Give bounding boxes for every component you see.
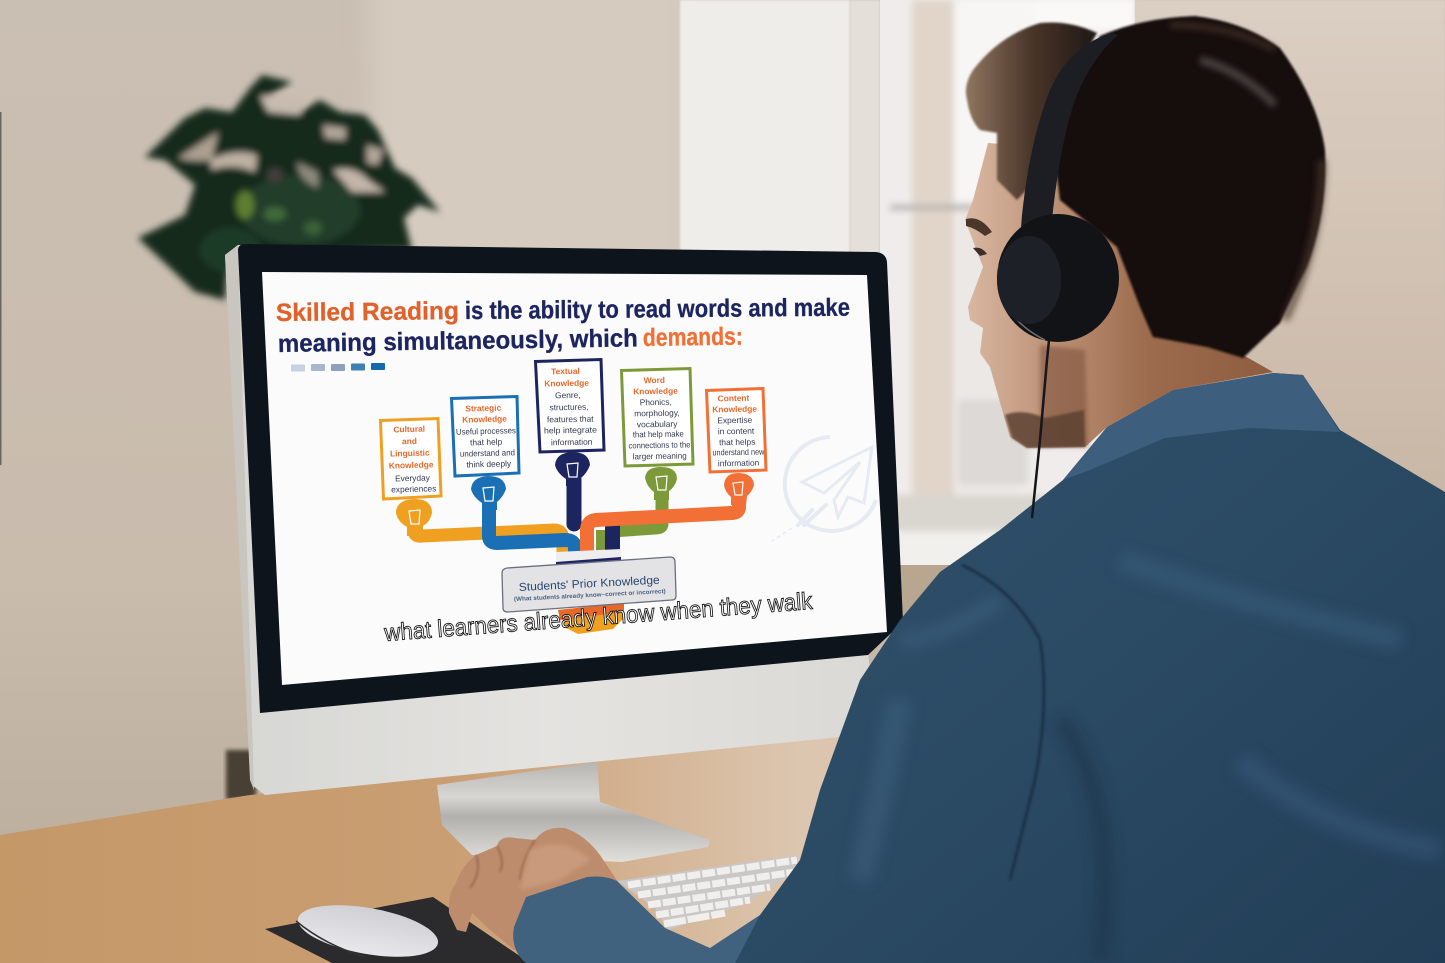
knowledge box: word: larger meaning	[633, 450, 687, 461]
title	[276, 294, 850, 358]
knowledge box: strategic: Knowledge	[462, 413, 507, 425]
knowledge box: strategic	[452, 396, 519, 476]
desk	[0, 735, 1000, 963]
knowledge box: content: Content	[718, 393, 750, 403]
knowledge box: word: vocabulary	[637, 419, 678, 429]
knowledge box: textual: information	[551, 437, 593, 447]
headphone cable	[1032, 340, 1049, 518]
title: meaning simultaneously, which	[278, 324, 638, 358]
pot shadow behind monitor	[226, 750, 256, 800]
knowledge box: content	[706, 388, 766, 472]
title: is the ability to read words and make	[465, 294, 850, 325]
knowledge box: word: morphology,	[634, 408, 680, 418]
shirt folds and seams	[860, 560, 1440, 960]
prior knowledge label	[502, 557, 676, 612]
shoulder seam	[962, 565, 1044, 880]
monitor bezel	[238, 244, 903, 713]
title: demands:	[643, 323, 743, 352]
icon: orange light bulb	[724, 473, 754, 505]
knowledge box: word: Phonics,	[640, 397, 672, 407]
icon: yellow light bulb	[396, 499, 432, 536]
knowledge box: textual: Knowledge	[544, 378, 589, 388]
knowledge box: cultural and linguistic: Linguistic	[390, 448, 430, 459]
knowledge box: textual: structures,	[549, 402, 589, 412]
monitor stand	[437, 762, 710, 862]
knowledge box: strategic: think deeply	[466, 458, 512, 470]
knowledge box: word: connections to the	[628, 439, 691, 451]
plant	[138, 75, 440, 300]
connector pipes	[414, 480, 739, 554]
monitor body	[225, 244, 903, 795]
knowledge box: content: Expertise	[717, 415, 753, 425]
knowledge box: word: Knowledge	[633, 386, 678, 396]
mouse	[294, 896, 442, 963]
knowledge box: strategic: understand and	[460, 447, 515, 459]
caption subtitle: what learners already know when they walk	[383, 588, 814, 647]
knowledge box: word: Word	[644, 375, 665, 385]
knowledge box: strategic: Useful processes	[456, 425, 516, 437]
connector base strip	[556, 549, 621, 566]
knowledge box: strategic: that help	[470, 437, 503, 447]
title: Skilled Reading	[276, 297, 459, 327]
hand	[449, 828, 620, 950]
knowledge box: content: information	[718, 458, 760, 468]
icon: navy light bulb	[555, 452, 590, 486]
knowledge box: content: understand new	[712, 446, 765, 457]
shirt collar	[1063, 373, 1340, 480]
knowledge box: strategic: Strategic	[465, 403, 502, 414]
orange and yellow base hexagon	[558, 603, 624, 634]
knowledge box: cultural and linguistic: Cultural	[393, 424, 425, 434]
person: neck and face	[965, 143, 1273, 448]
prior knowledge label: (What students already know–correct or incorrect)	[514, 589, 666, 603]
knowledge box: content: in content	[718, 426, 755, 436]
icon: blue light bulb	[471, 476, 506, 510]
knowledge box: cultural and linguistic: experiences	[391, 483, 436, 495]
person: front hair	[966, 22, 1097, 200]
paper plane watermark	[772, 437, 876, 541]
person: shirt	[513, 373, 1445, 963]
knowledge box: cultural and linguistic: Everyday	[395, 472, 431, 483]
knowledge box: textual	[536, 360, 604, 452]
knowledge box: content: Knowledge	[712, 404, 757, 414]
prior knowledge label: Students' Prior Knowledge	[519, 575, 660, 594]
knowledge box: word	[622, 368, 693, 466]
mouse pad	[265, 897, 530, 963]
icon: green light bulb	[645, 467, 677, 500]
knowledge box: cultural and linguistic: and	[402, 436, 417, 446]
knowledge box: cultural and linguistic	[380, 418, 441, 499]
person: back hair	[1050, 16, 1325, 358]
legend squares	[291, 363, 385, 372]
keyboard	[617, 855, 798, 930]
knowledge box: textual: Textual	[551, 366, 580, 376]
headphones	[997, 33, 1119, 518]
monitor screen slide	[262, 272, 887, 685]
knowledge box: textual: Genre,	[555, 390, 581, 400]
knowledge box: content: that helps	[719, 437, 755, 447]
knowledge box: textual: help integrate	[544, 425, 597, 435]
knowledge box: cultural and linguistic: Knowledge	[389, 459, 434, 471]
knowledge box: textual: features that	[547, 414, 594, 424]
shirt sleeve and cuff	[513, 876, 760, 963]
knowledge box: word: that help make	[633, 429, 684, 439]
